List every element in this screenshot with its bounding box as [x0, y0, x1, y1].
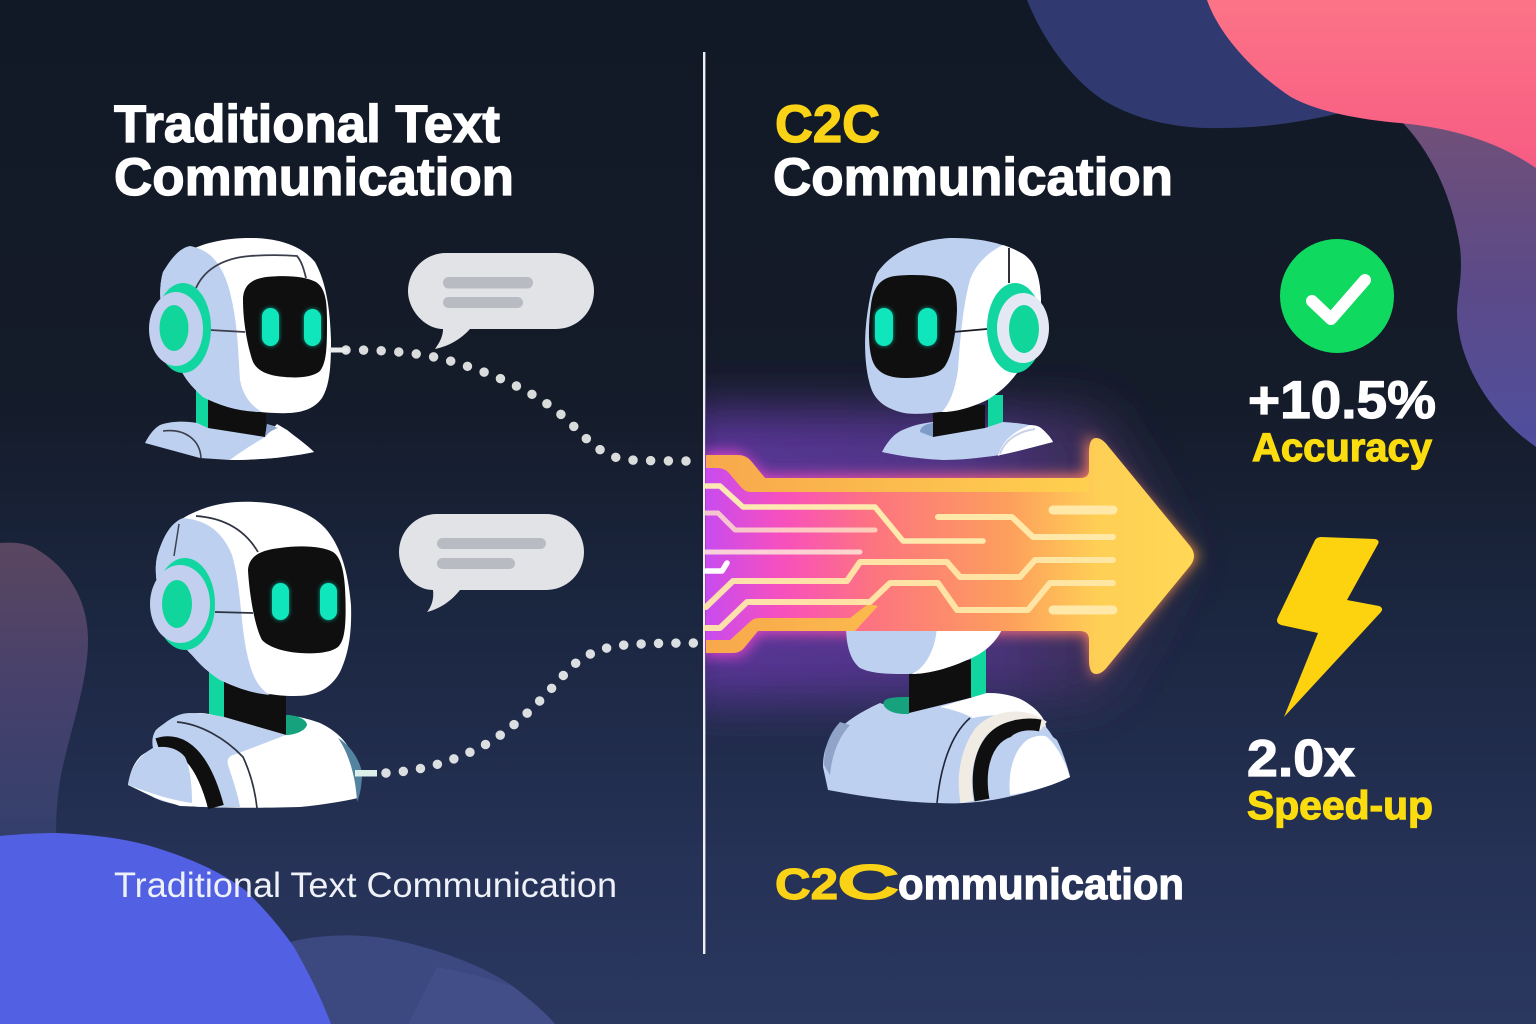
- stat: accuracy: +10.5%: [1248, 371, 1436, 430]
- decorative blob: bottom muted inner: [408, 967, 555, 1024]
- arrow glow: [680, 410, 1200, 700]
- icon: lightning bolt: [1277, 537, 1382, 717]
- title: traditional text communication: [114, 95, 514, 207]
- caption: c2c communication: C2: [775, 860, 838, 909]
- robot: top right: [865, 238, 1053, 460]
- title: traditional text communication: Communication: [114, 148, 514, 207]
- stat: speed-up: Speed-up: [1247, 784, 1433, 828]
- arrow circuit lines: [706, 486, 1113, 628]
- decorative blob: bottom left blue: [0, 833, 331, 1024]
- dotted connector bottom: [386, 643, 700, 773]
- decorative blob: top navy: [1027, 0, 1420, 128]
- stat: accuracy: [1248, 371, 1436, 470]
- caption: traditional text communication: Traditional Text Communication: [114, 866, 617, 905]
- speech bubble bottom: [399, 514, 584, 612]
- decorative blob: left mauve: [0, 543, 88, 840]
- decorative blob: top right pink: [1207, 0, 1536, 168]
- stat: speed-up: [1247, 730, 1433, 828]
- robot: top left: [145, 238, 346, 460]
- caption: c2c communication: ommunication: [898, 860, 1184, 909]
- title: c2c communication: C2C: [775, 95, 880, 154]
- icon: green check: [1280, 239, 1394, 353]
- title: c2c communication: Communication: [773, 148, 1173, 207]
- stat: accuracy: Accuracy: [1252, 426, 1433, 470]
- decorative blob: bottom muted: [290, 935, 555, 1024]
- title: c2c communication: [773, 95, 1173, 207]
- decorative blob: right purple: [1400, 120, 1536, 447]
- divider line: [703, 52, 705, 954]
- arrow: [706, 438, 1194, 674]
- robot: bottom right: [823, 625, 1070, 803]
- arrow bottom band: [706, 604, 878, 653]
- arrow top band: [706, 455, 1089, 492]
- dotted connector top: [346, 350, 700, 461]
- speech bubble top: [408, 253, 594, 349]
- robot: bottom left: [128, 502, 377, 808]
- caption: c2c communication: C: [838, 856, 898, 908]
- stat: speed-up: 2.0x: [1247, 730, 1355, 788]
- caption: c2c communication: [775, 856, 1184, 909]
- title: traditional text communication: Traditional Text: [114, 95, 500, 154]
